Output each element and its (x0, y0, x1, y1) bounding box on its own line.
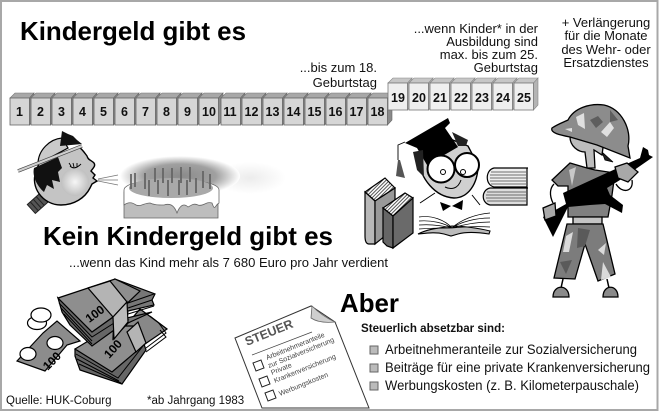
icon: tax form (235, 306, 369, 408)
label: bis zum 18. Geburtstag: ...bis zum 18. (300, 60, 377, 75)
age blocks 19 to 25: 24 (496, 91, 510, 105)
icon: book stack right (483, 168, 528, 205)
icon: book stack left (365, 178, 413, 248)
age blocks 1 to 18: 11 (223, 105, 237, 119)
icon: tax form: Private (270, 362, 293, 377)
subheading: income limit: ...wenn das Kind mehr als 7 680 Euro pro Jahr verdient (69, 255, 388, 270)
heading: Aber: Aber (340, 288, 399, 318)
label: Verlängerung: des Wehr- oder (561, 42, 651, 57)
age blocks 1 to 18: 14 (287, 105, 300, 119)
icon: soldier (543, 105, 653, 297)
age blocks 1 to 18 (10, 93, 392, 125)
icon: tax form: zur Sozialversicherung (267, 337, 336, 370)
icon: tax form: STEUER (243, 317, 295, 349)
title: Kindergeld gibt es: Kindergeld gibt es (20, 16, 246, 46)
age blocks 19 to 25: 20 (412, 91, 426, 105)
icon: birthday cake (120, 156, 286, 218)
age blocks 1 to 18: 16 (329, 105, 342, 119)
icon: money (17, 279, 167, 384)
bullet list: Werbungskosten (z. B. Kilometerpauschale) (385, 378, 639, 393)
age blocks 1 to 18: 8 (163, 105, 170, 119)
label: wenn Kinder in der Ausbildung: Ausbildung sind (446, 34, 538, 49)
label: wenn Kinder in der Ausbildung: max. bis zum 25. (440, 47, 538, 62)
age blocks 1 to 18: 6 (121, 105, 128, 119)
age blocks 19 to 25: 21 (433, 91, 447, 105)
age blocks 1 to 18: 18 (371, 105, 384, 119)
age blocks 19 to 25: 23 (475, 91, 489, 105)
age blocks 1 to 18: 1 (16, 105, 23, 119)
age blocks 1 to 18: 4 (79, 105, 86, 119)
label: Verlängerung: für die Monate (564, 28, 648, 43)
label: wenn Kinder in der Ausbildung: ...wenn Kinder* in der (414, 21, 539, 36)
heading: Kein Kindergeld gibt es: Kein Kindergeld gibt es (43, 221, 333, 251)
age blocks 1 to 18: 13 (266, 105, 279, 119)
age blocks 1 to 18: 2 (37, 105, 44, 119)
icon: tax form: Krankenversicherung (273, 354, 337, 385)
bullet list: Beiträge für eine private Krankenversicherung (385, 360, 650, 375)
age blocks 1 to 18: 17 (350, 105, 363, 119)
icon: open book (418, 213, 490, 236)
age blocks 19 to 25 (388, 78, 538, 110)
age blocks 1 to 18: 9 (184, 105, 191, 119)
label: wenn Kinder in der Ausbildung: Geburtstag (474, 60, 538, 75)
age blocks 1 to 18: 10 (202, 105, 216, 119)
age blocks 1 to 18: 5 (100, 105, 107, 119)
bullet list (370, 342, 650, 393)
lower stack (122, 309, 167, 344)
icon: graduate student (396, 118, 480, 211)
age blocks 1 to 18: 3 (58, 105, 65, 119)
icon: tax form: Werbungskosten (278, 372, 329, 398)
age blocks 19 to 25: 22 (454, 91, 468, 105)
label: bis zum 18. Geburtstag: Geburtstag (313, 75, 377, 90)
age blocks 1 to 18: 12 (245, 105, 258, 119)
deductible heading: Steuerlich absetzbar sind: (361, 321, 505, 335)
icon: money: 100 (40, 349, 64, 373)
icon: money: 100 (101, 337, 125, 361)
age blocks 1 to 18: 15 (308, 105, 321, 119)
label: Verlängerung: Ersatzdienstes (563, 55, 649, 70)
source: Quelle: HUK-Coburg (6, 395, 111, 407)
icon: money: 100 (83, 302, 107, 326)
label: Verlängerung: + Verlängerung (562, 15, 650, 30)
top stack (113, 279, 155, 339)
icon: tax form: Arbeitnehmeranteile (265, 332, 326, 362)
age blocks 1 to 18: 7 (142, 105, 149, 119)
loose bill (17, 321, 80, 371)
age blocks 19 to 25: 19 (391, 91, 405, 105)
age blocks 19 to 25: 25 (517, 91, 531, 105)
footnote: *ab Jahrgang 1983 (147, 395, 244, 407)
bullet list: Arbeitnehmeranteile zur Sozialversicherung (385, 342, 637, 357)
icon: boy blowing candles (18, 131, 118, 213)
